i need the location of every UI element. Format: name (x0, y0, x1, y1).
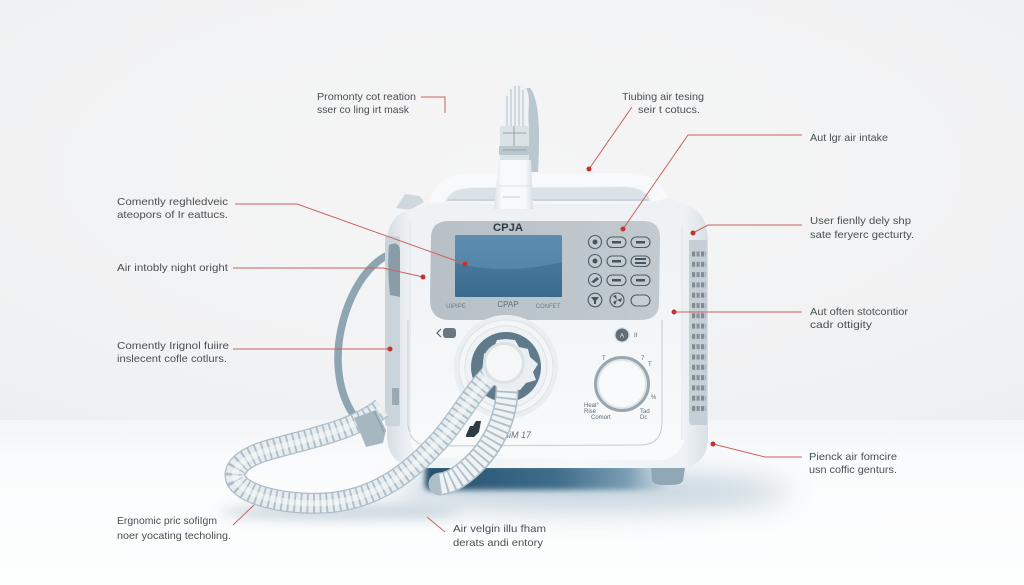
right vent grille (689, 240, 707, 425)
panel captions: CONFET (536, 304, 561, 310)
callout: top left: Promonty cot reation (317, 91, 416, 103)
panel captions (446, 300, 561, 310)
dial scale labels (584, 356, 657, 421)
control dial (584, 356, 657, 421)
callout: air intake (620, 132, 888, 232)
callout: right upper: User fienlly dely shp (810, 215, 911, 227)
keypad buttons (588, 236, 650, 307)
callout: right lower (710, 442, 897, 476)
dial scale labels: Dc (640, 415, 647, 421)
callout: left upper: Comently reghledveic (117, 196, 228, 208)
callout: right middle: cadr ottigity (810, 319, 873, 331)
back arrow icon (437, 328, 456, 338)
callout: left middle (117, 262, 426, 280)
callout: left lower: Comently Irignol fuiire (117, 340, 229, 352)
callout: bottom left: Ergnomic pric sofiIgm (117, 515, 217, 527)
callout: right lower: Pienck air fomcire (809, 451, 897, 463)
dial scale labels: T (602, 356, 606, 362)
callout: left lower (117, 340, 392, 365)
dial scale labels: % (651, 395, 657, 401)
left side strip and grip (385, 236, 400, 426)
port gear and cap (482, 339, 538, 390)
strap clip on handle (494, 160, 533, 209)
callout: right middle (672, 306, 909, 331)
callout: top centre: Tiubing air tesing (622, 91, 704, 103)
callout: left middle: Air intobly night oright (117, 262, 228, 274)
callout: left lower: inslecent cofle cotlurs. (117, 353, 227, 365)
device foot (651, 468, 685, 485)
thin air hose at left side (338, 254, 390, 421)
callout: right lower: usn coffic genturs. (809, 464, 897, 476)
callout: right middle: Aut often stotcontior (810, 306, 909, 318)
rear tube with strap arch (499, 84, 539, 172)
callout: top centre: seir t cotucs. (638, 104, 700, 116)
air outlet port rings (454, 315, 558, 419)
callout: air intake: Aut lgr air intake (810, 132, 888, 144)
knob on top left (396, 194, 424, 210)
power button: A (620, 334, 624, 340)
floor shadow (220, 464, 790, 520)
second hose loop (440, 380, 507, 484)
brand label: CPJA (493, 222, 523, 234)
callout: right upper: sate feryerc gecturty. (810, 229, 914, 241)
callout: left upper: ateopors of Ir eattucs. (117, 209, 228, 221)
callout: bottom left: noer yocating techoling. (117, 530, 231, 542)
display screen (455, 235, 562, 297)
dial scale labels: 7 (641, 356, 645, 362)
control panel (430, 221, 660, 320)
callout: top left: sser co ling irt mask (317, 104, 410, 116)
dial scale labels: T (648, 362, 652, 368)
device body (387, 173, 708, 468)
callout: top left (317, 91, 445, 116)
callout: left upper (117, 196, 468, 266)
callout: bottom centre (427, 517, 546, 549)
callout: bottom centre: derats andi entory (453, 537, 544, 549)
panel captions: UIPIPE (446, 304, 466, 310)
callout: bottom centre: Air velgin illu fham (453, 523, 546, 535)
panel captions: CPAP (497, 300, 519, 309)
callout: top centre (586, 91, 704, 172)
model label: BiM 17 (503, 430, 532, 440)
dark logo mark (466, 421, 481, 437)
dial scale labels: Comort (591, 415, 611, 421)
callout: bottom left (117, 505, 254, 542)
hose connector (354, 410, 386, 447)
dial scale labels: Rise (584, 409, 597, 415)
power button: II (634, 333, 638, 339)
corrugated main hose (235, 375, 490, 503)
callout: right upper (690, 215, 914, 241)
dial scale labels: Heat° (584, 403, 600, 409)
carry handle (430, 173, 668, 203)
power button (614, 327, 638, 343)
dial scale labels: Tad (640, 409, 650, 415)
